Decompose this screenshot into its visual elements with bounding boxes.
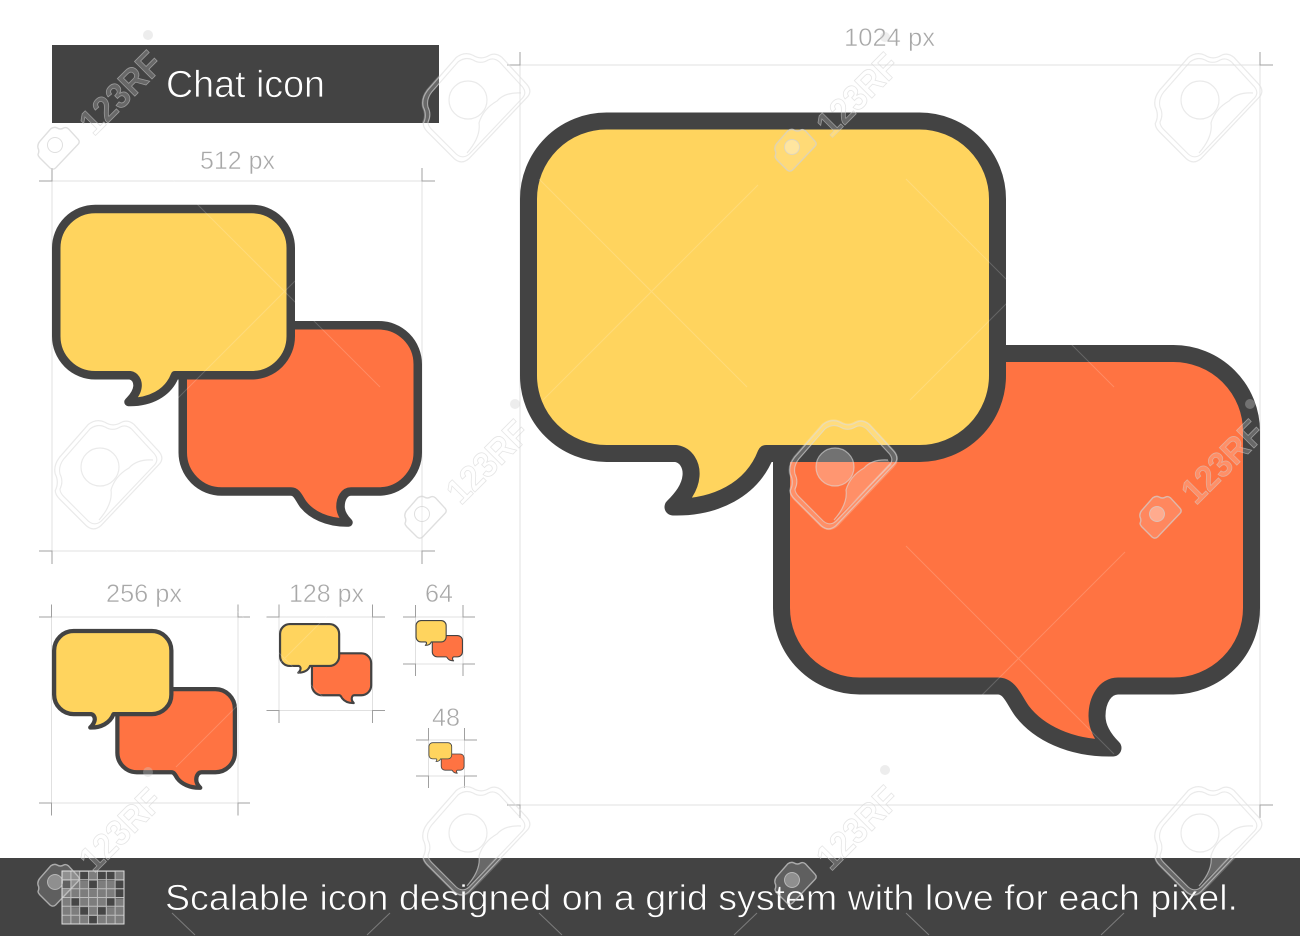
footer bar <box>0 858 1300 936</box>
title banner <box>52 45 439 123</box>
panel: 64 px icon <box>403 580 475 676</box>
label: 64: 64 <box>425 580 453 608</box>
title banner: Chat icon <box>166 64 325 106</box>
icon: chat bubbles 1024 <box>528 121 1252 748</box>
label: 256 px: 256 px <box>106 580 183 608</box>
panel: 256 px icon <box>39 580 250 816</box>
watermark: diagonal crossing lines <box>172 179 1125 935</box>
icon: chat bubbles 256 <box>54 631 235 788</box>
label: 128 px: 128 px <box>289 580 364 608</box>
panel: 48 px icon <box>416 704 477 788</box>
label: 512 px: 512 px <box>200 147 275 175</box>
label: 48: 48 <box>432 704 460 732</box>
icon: chat bubbles 512 <box>56 209 418 523</box>
label: 1024 px: 1024 px <box>844 24 936 52</box>
footer tagline: Scalable icon designed on a grid system with love for each pixel. <box>165 877 1238 918</box>
panel: 128 px icon <box>266 580 385 723</box>
icon: chat bubbles 128 <box>280 624 371 703</box>
icon: chat bubbles 48 <box>429 743 464 773</box>
icon: chat bubbles 64 <box>416 621 462 661</box>
icon: pixel grid <box>62 871 124 924</box>
panel: 512 px icon <box>39 147 435 564</box>
